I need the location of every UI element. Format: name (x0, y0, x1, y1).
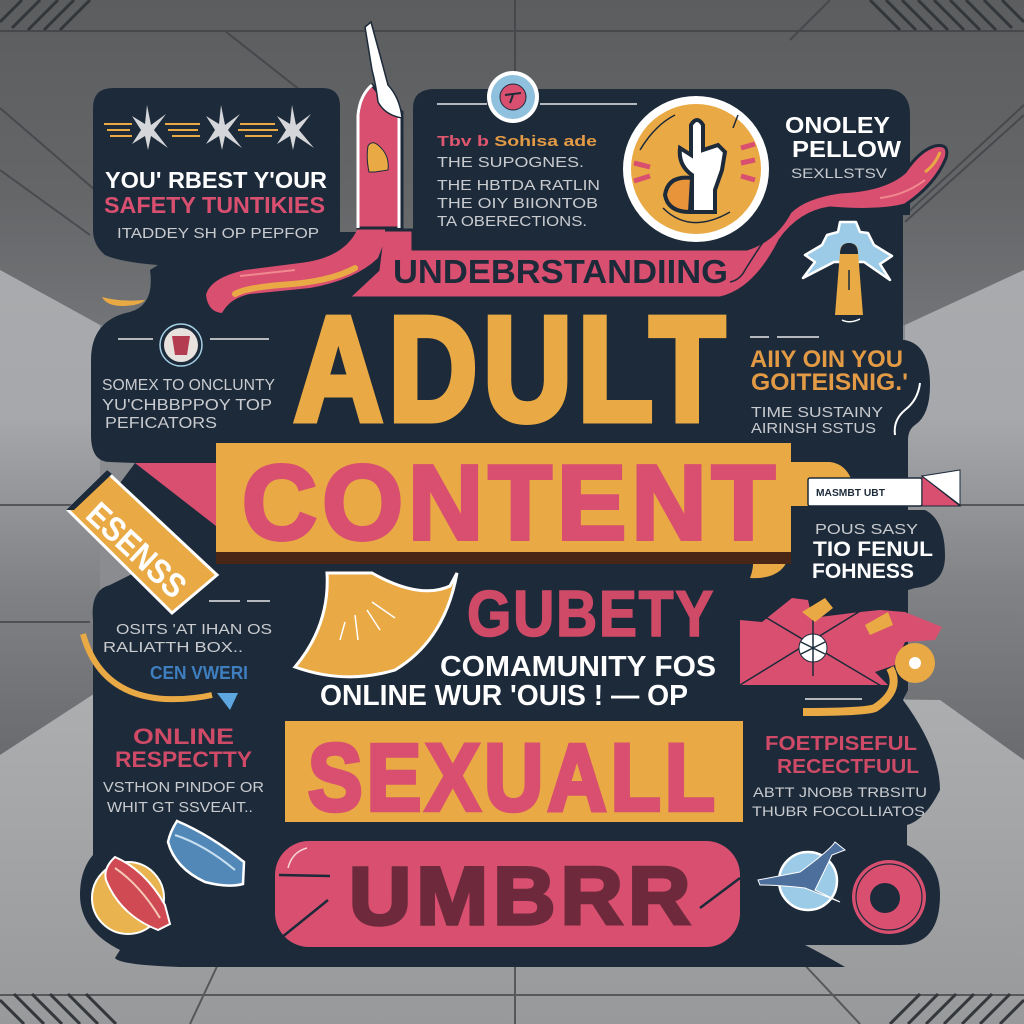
text block: lower right: FOETPISEFUL (765, 733, 917, 755)
text block: lower left: VSTHON PINDOF OR (103, 779, 264, 796)
heading: right top: SEXLLSTSV (791, 165, 888, 181)
text block: lower left: ONLINE (133, 724, 234, 749)
panel: right side text: AIRINSH SSTUS (751, 420, 876, 437)
heading: right top: ONOLEY (785, 112, 890, 138)
heading: top centre: Tbv b Sohisa ade (437, 133, 597, 150)
heading: card 1: YOU' RBEST Y'OUR (105, 167, 327, 193)
icon: small badge (487, 71, 539, 123)
dark infographic panel (80, 88, 945, 967)
panel: right side text: GOITEISNIG.' (751, 369, 908, 396)
panel: mid left text: YU'CHBBPPOY TOP (102, 397, 272, 414)
panel: safety card (104, 105, 327, 242)
panel: right side text: TIME SUSTAINY (751, 404, 883, 421)
panel: right side text (750, 337, 920, 437)
panel: mid left text: SOMEX TO ONCLUNTY (102, 377, 275, 394)
tag: rotated label (66, 470, 217, 613)
icon: orange fan (295, 573, 457, 677)
text block: right mid (812, 521, 933, 583)
body: top centre: THE OIY BIIONTOB (437, 195, 598, 212)
body: top centre (437, 154, 600, 230)
body: top centre: THE HBTDA RATLIN (437, 177, 600, 194)
text block: right mid: TIO FENUL (813, 538, 933, 561)
subheading: card 1: SAFETY TUNTIKIES (104, 192, 325, 218)
label: white ribbon flag (808, 470, 960, 506)
body: top centre: THE SUPOGNES. (437, 154, 584, 171)
text block: lower left: OSITS 'AT IHAN OS (116, 621, 272, 638)
text block: lower left: CEN VWERI (150, 663, 248, 683)
icon: orange accent (102, 297, 145, 306)
text block: lower left: RALIATTH BOX.. (103, 639, 243, 656)
icon: pink target (852, 860, 926, 934)
body: card 1: ITADDEY SH OP PEPFOP (117, 225, 319, 242)
banner: umbrr: UMBRR (349, 850, 690, 942)
icon: broken envelope (740, 598, 942, 712)
pink strip behind content bar (135, 463, 216, 526)
subheading: community: COMAMUNITY FOS (440, 651, 716, 683)
heading: right top (785, 112, 901, 181)
body: top centre: TA OBERECTIONS. (437, 213, 587, 230)
text block: lower right: ABTT JNOBB TRBSITU (753, 784, 927, 800)
text block: lower left (83, 601, 272, 816)
text block: lower right: RECECTFUUL (777, 756, 919, 778)
heading: understanding: UNDEBRSTANDIING (393, 253, 728, 290)
banner: content: CONTENT (242, 444, 775, 562)
icon: small portrait badge (160, 324, 202, 366)
text block: lower right (752, 733, 927, 819)
text block: lower right: THUBR FOCOLLIATOS (752, 803, 925, 819)
ribbon: understanding banner (348, 146, 947, 298)
panel: top centre text (437, 71, 637, 230)
subheading: community (320, 651, 716, 712)
title: adult: ADULT (294, 286, 725, 452)
heading: right top: PELLOW (792, 136, 901, 162)
icon: raised hand in circle (623, 96, 769, 242)
banner: umbrr (275, 841, 740, 947)
panel: right side text: AIIY OIN YOU (750, 346, 903, 373)
icon: pen (358, 22, 402, 228)
callout: orange tab behind banner (750, 462, 856, 578)
icon: blue fan and orange tag (803, 222, 892, 322)
text block: right mid: POUS SASY (815, 521, 918, 538)
icon: red leaf on orange circle (92, 857, 170, 934)
icon: bird on blue circle (758, 842, 845, 910)
text block: lower left: WHIT GT SSVEAIT.. (107, 799, 253, 816)
banner: sexuall: SEXUALL (308, 724, 715, 830)
subheading: community: ONLINE WUR 'OUIS ! — OP (320, 680, 688, 712)
icon: barbed wire row (104, 105, 314, 150)
text block: lower left: RESPECTTY (115, 747, 252, 772)
arrow: orange curve (83, 634, 238, 710)
heading: gubety: GUBETY (467, 578, 713, 650)
icon: blue leaf (168, 821, 244, 886)
panel: mid left text (102, 324, 275, 432)
left ribbon swoosh (206, 228, 385, 313)
icon: orange wheel (895, 643, 935, 683)
tag: rotated label: ESENSS (79, 495, 194, 606)
text block: right mid: FOHNESS (812, 560, 914, 583)
panel: mid left text: PEFICATORS (105, 415, 217, 432)
label: white ribbon flag: MASMBT UBT (816, 488, 885, 499)
